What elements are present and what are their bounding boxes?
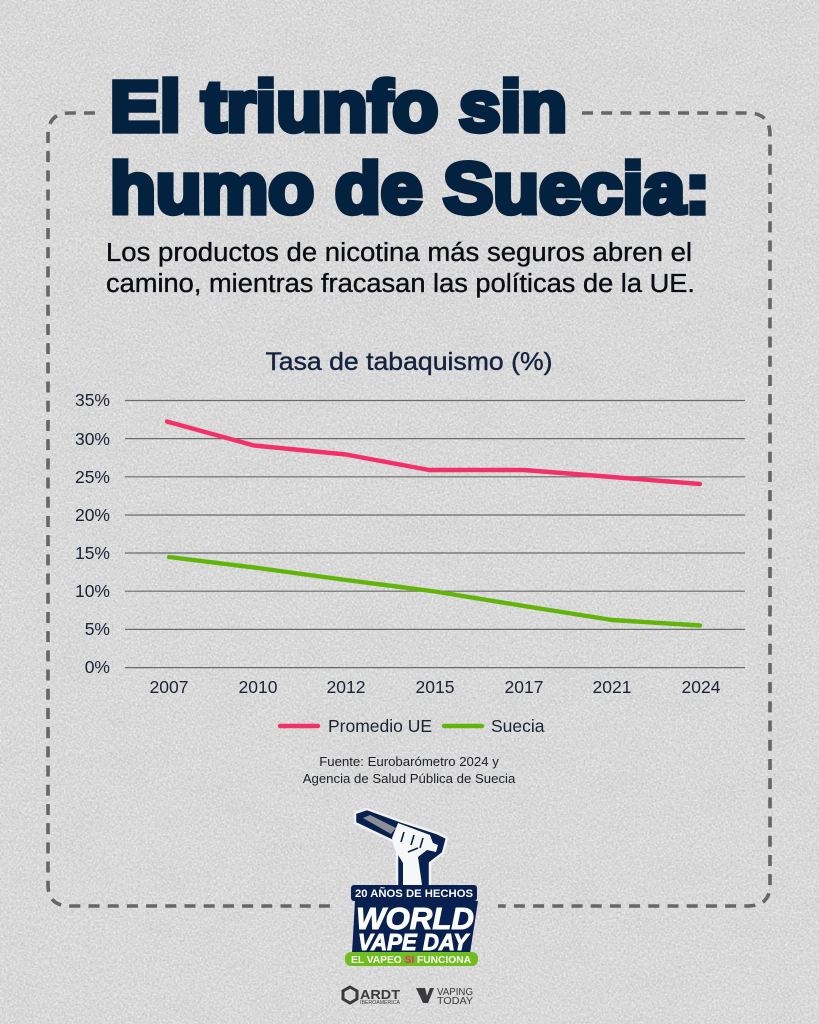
badge: 20 años de hechos: [351, 885, 477, 901]
line: Suecia: [169, 557, 700, 626]
logo: Vaping Today: VAPING: [437, 987, 473, 998]
logo: World Vape Day: VAPE DAY: [358, 929, 471, 955]
x axis labels: 2015: [416, 677, 454, 697]
subtitle: [106, 239, 695, 298]
title: El triunfo sin: [110, 68, 567, 147]
legend: Promedio UE: [328, 716, 432, 736]
logo: ARDT Iberoamérica: [343, 987, 400, 1006]
wordmark: World Vape Day: [352, 901, 478, 953]
y axis labels: 0%: [85, 657, 110, 677]
y axis labels: 25%: [75, 467, 110, 487]
logo: Vaping Today: TODAY: [437, 996, 473, 1007]
logo: World Vape Day: EL VAPEO SI FUNCIONA: [351, 955, 471, 966]
source note: Fuente: Eurobarómetro 2024 y: [319, 754, 499, 769]
line: Promedio UE: [167, 422, 700, 484]
x axis labels: 2017: [505, 677, 543, 697]
logo: World Vape Day: WORLD: [356, 901, 474, 936]
x axis labels: 2010: [239, 677, 278, 697]
legend: Suecia: [491, 716, 545, 736]
title: [110, 68, 710, 229]
logo: World Vape Day: [345, 809, 478, 966]
logo: Vaping Today: [416, 987, 473, 1007]
chart title: Tasa de tabaquismo (%): [266, 348, 552, 376]
legend: [280, 716, 545, 736]
logo: ARDT Iberoamérica: IBEROAMERICA: [360, 1000, 400, 1006]
x axis labels: 2021: [593, 677, 631, 697]
source note: Agencia de Salud Pública de Suecia: [303, 771, 516, 786]
source note: [303, 754, 516, 786]
logo: World Vape Day: 20 AÑOS DE HECHOS: [355, 887, 473, 900]
y axis labels: 5%: [85, 619, 110, 639]
icon: fist holding vape: [355, 809, 447, 888]
badge: el vapeo si funciona: [345, 952, 478, 966]
gridlines: [125, 400, 745, 668]
y axis labels: 10%: [75, 581, 110, 601]
subtitle: Los productos de nicotina más seguros abren el: [106, 239, 692, 267]
x axis labels: 2007: [150, 677, 188, 697]
y axis labels: 20%: [75, 505, 110, 525]
x axis labels: 2024: [682, 677, 721, 697]
dashed frame: [48, 113, 770, 906]
y axis labels: 15%: [75, 543, 110, 563]
y axis labels: [75, 390, 110, 677]
x axis labels: [150, 677, 721, 697]
chart: smoking rate: [75, 348, 745, 736]
y axis labels: 30%: [75, 429, 110, 449]
title: humo de Suecia:: [110, 150, 710, 229]
logo: ARDT Iberoamérica: ARDT: [360, 987, 400, 1002]
subtitle: camino, mientras fracasan las políticas de la UE.: [106, 270, 695, 298]
x axis labels: 2012: [327, 677, 365, 697]
y axis labels: 35%: [75, 390, 110, 410]
